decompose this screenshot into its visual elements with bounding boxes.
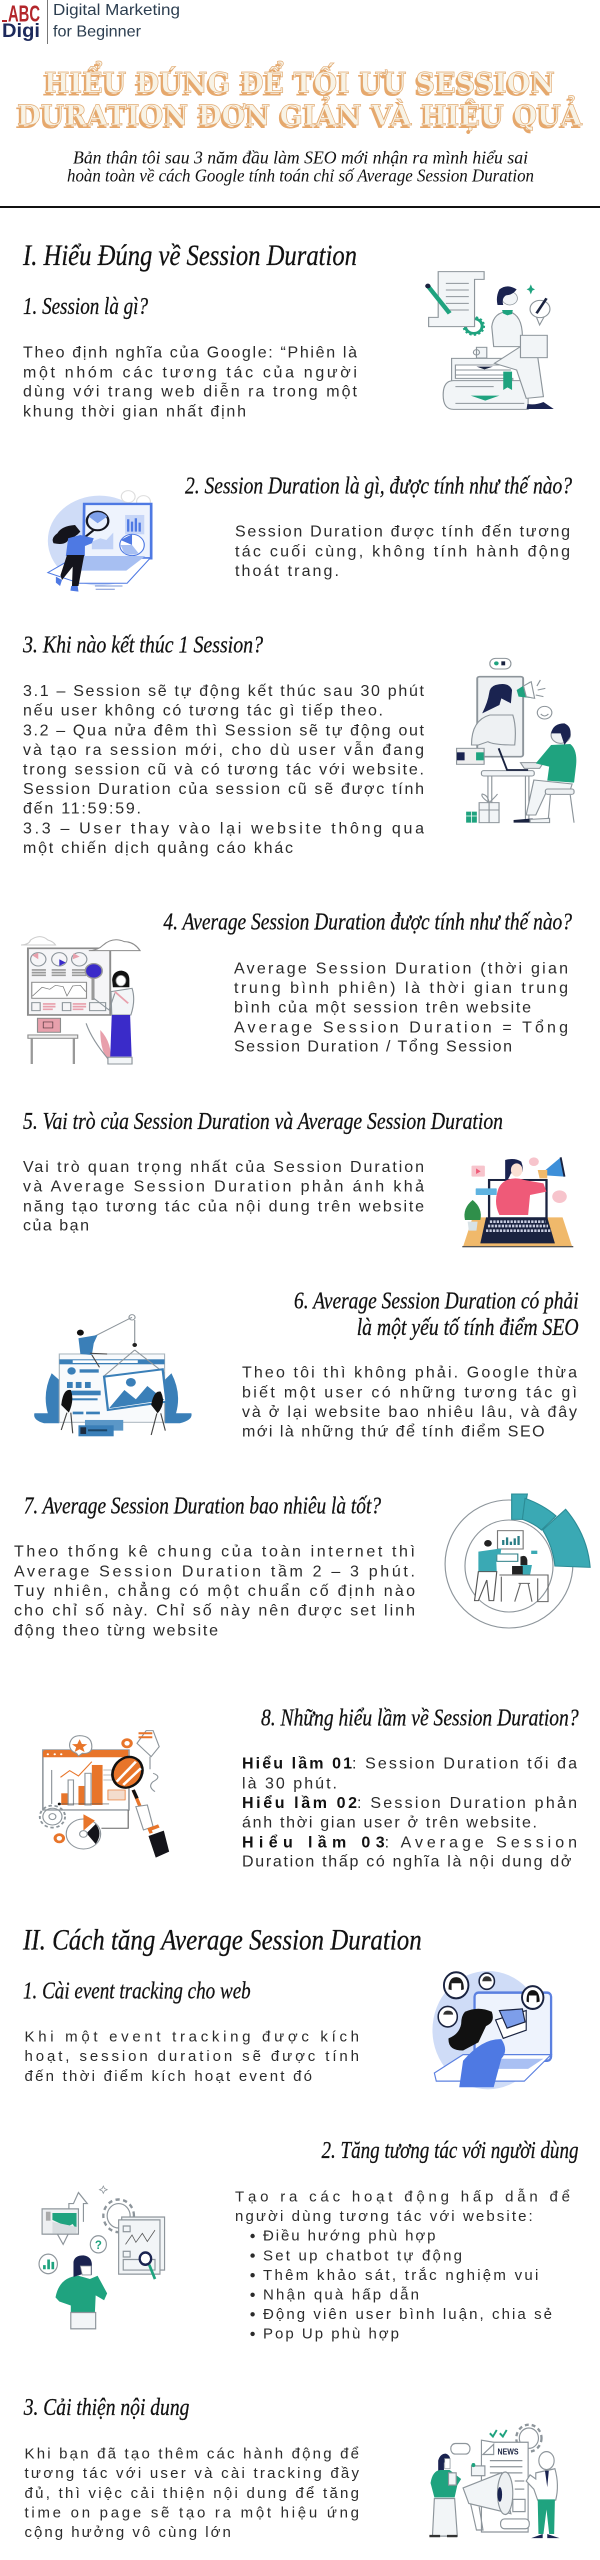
heading: 3. Khi nào kết thúc: 3. Khi nào kết thúc 1 Session? [22,633,263,659]
icon: woman presenting dashboard board [21,937,140,1064]
text block: misconceptions: : Average Session [385,1834,577,1851]
logo: ABC Digi, Digital Marketing for Beginner: Digital Marketing [53,2,180,19]
text block: misconceptions: : Session Duration tối đa [352,1756,577,1773]
icon: news, megaphone and two people [429,2425,560,2538]
text block: session end rules: Session Duration của session cũ sẽ được tính [23,781,424,798]
text block: improve content: tương tác với user và cài tracking đầy [24,2465,360,2482]
text block: event tracking: đến thời điểm kích hoạt event đó [24,2068,312,2085]
text block: session duration: thoát trang. [235,563,339,580]
icon: donut chart with teal sectors and people working [445,1494,590,1628]
icon: woman with envelope and laptop avatars [432,1971,551,2089]
text block: good duration: Tuy nhiên, chẳng có một chuẩn cố định nào [14,1581,415,1600]
title: DURATION ĐƠN GIẢN VÀ HIỆU QUẢ [17,95,583,132]
text block: role of session duration: của bạn [23,1218,89,1235]
text block: SEO factor answer: và ở lại website bao nhiêu lâu, và đây [242,1404,577,1421]
text block: misconceptions: : Session Duration phản [357,1795,577,1812]
text block: misconceptions: Hiểu lầm 02 [242,1794,357,1812]
text block: misconceptions: là 30 phút. [242,1775,337,1792]
text block: session duration: Session Duration được tính đến tương [235,524,570,541]
text block: role of session duration: Vai trò quan trọng nhất của Session Duration [23,1159,424,1176]
text block: role of session duration: và Average Session Duration phản ánh khả [23,1179,424,1196]
heading: 6. Average Session Duration có phải [294,1288,579,1341]
text block: session end rules [23,683,425,857]
text block: improve content: đủ, thì việc cải thiện nội dung để tăng [24,2485,359,2502]
text block: session end rules: trong session cũ và có tương tác với website. [23,762,424,779]
text block: improve content: cộng hưởng vô cùng lớn [24,2524,231,2541]
text block: session end rules: 3.3 – User thay vào lại website thông qua [23,820,424,837]
text block: event tracking: Khi một event tracking được kích [24,2029,359,2046]
text block: good duration: cho chỉ số này. Chỉ số này nên được set linh [14,1603,415,1620]
subtitle [67,147,534,186]
text block: engagement with bullet list: Thêm khảo sát, trắc nghiệm vui [263,2267,538,2284]
text block: session end rules: nếu user không có tương tác gì tiếp theo. [23,703,383,720]
text block: session end rules: và tạo ra session mới, cho dù user vẫn đang [23,740,424,759]
text block: SEO factor answer: mới là những thứ để tính điểm SEO [242,1423,545,1441]
icon: news, megaphone and two people: NEWS [498,2447,519,2457]
text block: misconceptions: ánh thời gian user ở trên website. [242,1815,537,1832]
text block: SEO factor answer: Theo tôi thì không phải. Google thừa [242,1365,577,1382]
text block: session definition: khung thời gian nhất định [23,403,246,420]
text block: engagement with bullet list: Động viên user bình luận, chia sẻ [263,2306,552,2323]
text block: average session duration formula: bình của một session trên website [234,1000,531,1017]
heading: 5. Vai trò: 5. Vai trò của Session Duration và Average Session Duration [23,1109,503,1135]
text block: improve content: time on page sẽ tạo ra một hiệu ứng [24,2504,359,2521]
text block: misconceptions [242,1755,577,1871]
text block: session definition: Theo định nghĩa của Google: “Phiên là [23,345,357,362]
text block: session end rules: 3.1 – Session sẽ tự động kết thúc sau 30 phút [23,683,425,700]
text block: session end rules: một chiến dịch quảng cáo khác [23,840,293,857]
subtitle: hoàn toàn về cách Google tính toán chỉ số Average Session Duration [67,166,534,186]
icon: team building a web page [34,1315,192,1436]
text block: event tracking [24,2029,359,2085]
heading: 3. Cải thiện nội dung: 3. Cải thiện nội dung [23,2395,189,2421]
title [15,61,583,135]
text block: average session duration formula: Session Duration / Tổng Session [234,1038,512,1056]
text block: engagement with bullet list: Nhận quà hấp dẫn [263,2286,419,2304]
text block: session duration [235,524,570,580]
text block: engagement with bullet list: Điều hướng phù hợp [263,2228,436,2245]
text block: engagement with bullet list: người dùng tương tác với website: [235,2208,533,2225]
text block: average session duration formula: Average Session Duration (thời gian [234,960,568,977]
text block: engagement with bullet list: Set up chatbot tự động [263,2247,462,2264]
text block: engagement with bullet list: Tạo ra các hoạt động hấp dẫn để [235,2188,570,2206]
heading: section I: I. Hiểu Đúng về Session Duration [22,239,357,272]
text block: session definition: một nhóm các tương tác của người [23,364,357,381]
logo: ABC Digi, Digital Marketing for Beginner [2,0,180,44]
icon: analytics window with magnifier [40,1731,169,1858]
text block: good duration: Average Session Duration tầm 2 – 3 phút. [14,1563,415,1580]
icon: woman with megaphone on screen and man at desk [457,658,576,823]
icon: woman sitting on books with laptop [425,272,554,409]
title: DURATION ĐƠN GIẢN VÀ HIỆU QUẢ [15,98,581,135]
text block: role of session duration: năng tạo tương tác của nội dung trên website [23,1198,424,1215]
title: HIỂU ĐÚNG ĐỂ TỐI ƯU SESSION [42,64,553,102]
subtitle: Bản thân tôi sau 3 năm đầu làm SEO mới nhận ra mình hiểu sai [73,147,528,167]
text block: session end rules: đến 11:59:59. [23,801,141,818]
heading: section II: II. Cách tăng Average Session Duration [22,1923,422,1956]
text block: good duration: Theo thống kê chung của toàn internet thì [14,1544,415,1561]
icon: thinking woman with charts: ? [95,2238,102,2252]
heading: 1. Cài event tracking: 1. Cài event tracking cho web [23,1978,251,2004]
text block: misconceptions: Duration thấp có nghĩa là nội dung dở [242,1854,572,1871]
icon: thinking woman with charts [39,2186,165,2329]
text block: average session duration formula [234,960,568,1056]
text block: improve content: Khi bạn đã tạo thêm các hành động để [24,2446,359,2463]
heading: 1. Session là gì: 1. Session là gì? [23,294,148,320]
text block: session definition: dùng với trang web diễn ra trong một [23,382,358,401]
text block: good duration [14,1544,415,1639]
text block: engagement with bullet list: Pop Up phù hợp [263,2326,399,2343]
text block: event tracking: hoạt, session duration sẽ được tính [24,2048,359,2065]
text block: SEO factor answer [242,1365,577,1441]
text block: improve content [24,2446,360,2541]
logo: ABC Digi, Digital Marketing for Beginner: for Beginner [53,24,142,41]
text block: role of session duration [23,1159,424,1235]
icon: woman with magnifier and laptop dashboard [48,491,151,592]
text block: engagement with bullet list [235,2188,570,2343]
text block: session definition [23,345,358,420]
text block: misconceptions: Hiểu lầm 03 [242,1833,385,1851]
text block: average session duration formula: Average Session Duration = Tổng [234,1018,568,1036]
text block: SEO factor answer: biết một user có những tương tác gì [242,1384,577,1401]
text block: good duration: động theo từng website [14,1622,218,1639]
text block: session duration: tác cuối cùng, không tính hành động [235,543,570,560]
text block: misconceptions: Hiểu lầm 01 [242,1755,352,1773]
heading: 7. Average Session Duration bao nhiêu: 7. Average Session Duration bao nhiêu là tốt? [24,1493,381,1519]
icon: woman with megaphone on laptop [462,1157,573,1247]
text block: session end rules: 3.2 – Qua nửa đêm thì Session sẽ tự động out [23,722,425,739]
text block: average session duration formula: trung bình phiên) là thời gian trung [234,980,568,997]
title: HIỂU ĐÚNG ĐỂ TỐI ƯU SESSION [44,61,555,100]
logo: ABC Digi, Digital Marketing for Beginner: Digi [2,21,40,42]
logo: ABC Digi, Digital Marketing for Beginner: ABC [8,1,40,27]
